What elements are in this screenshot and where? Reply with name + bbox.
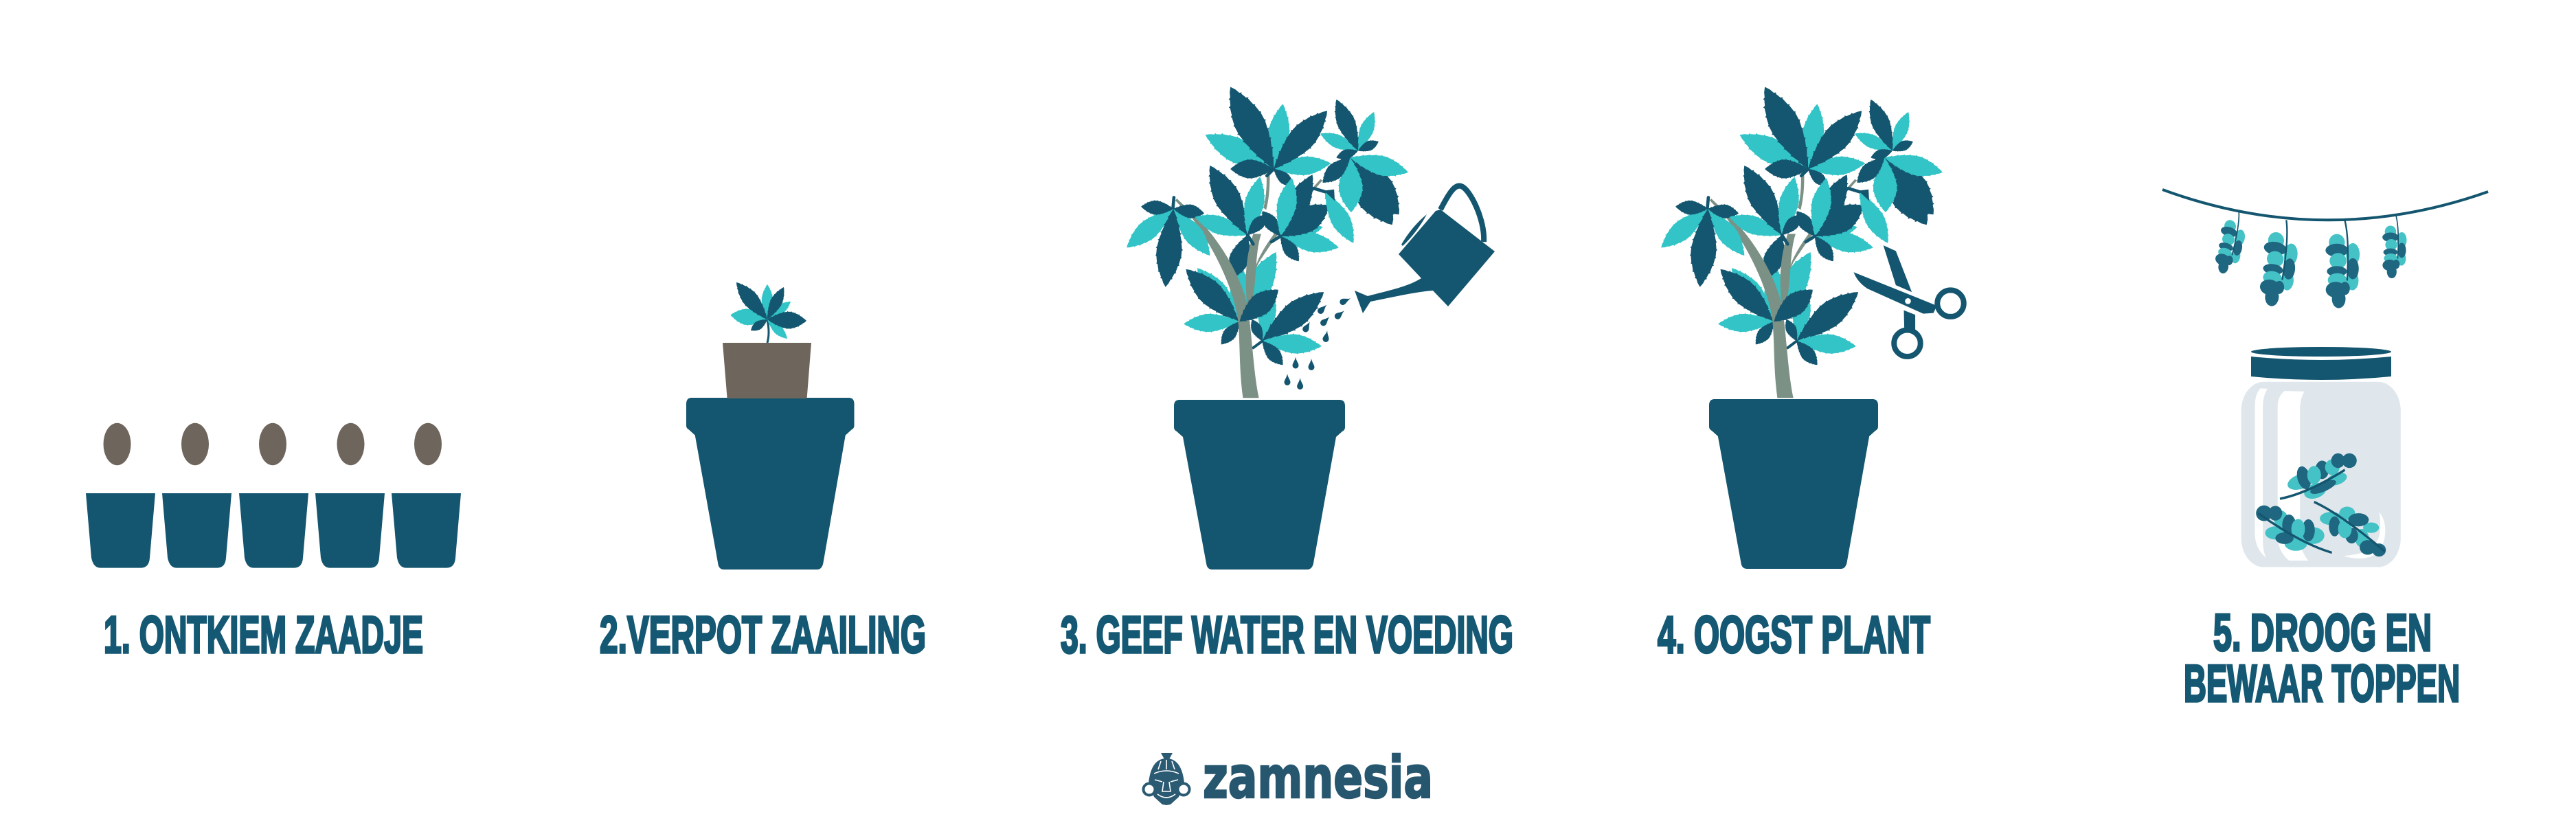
jar lid xyxy=(2251,347,2391,380)
label step 1: 1. ONTKIEM ZAADJE xyxy=(104,606,423,664)
step 1: germinate seeds xyxy=(86,423,461,664)
logo: zamnesia xyxy=(1143,744,1433,811)
label step 5 xyxy=(2184,604,2460,713)
label step 2: 2.VERPOT ZAAILING xyxy=(600,606,926,664)
pot 3 xyxy=(1174,400,1345,570)
large pot xyxy=(686,398,855,570)
seeds xyxy=(103,423,442,465)
jar bud: top xyxy=(2280,453,2357,501)
jar bud: lower left xyxy=(2256,506,2332,552)
icon: watering can xyxy=(1355,186,1495,313)
glass jar xyxy=(2241,382,2401,567)
icon: scissors xyxy=(1854,245,1964,357)
plant 4 xyxy=(1654,80,1947,398)
step 2: repot seedling xyxy=(600,277,926,664)
label step 4: 4. OOGST PLANT xyxy=(1658,606,1930,664)
wordmark: zamnesia xyxy=(1203,744,1433,811)
step 3: water and feed xyxy=(1061,80,1513,664)
peat pot xyxy=(723,343,811,398)
icon: tribal mask xyxy=(1143,753,1190,805)
small pots xyxy=(86,493,461,568)
plant 3 xyxy=(1120,80,1412,398)
step 5: dry and store buds xyxy=(2162,190,2488,713)
pot 4 xyxy=(1709,399,1878,569)
label step 3: 3. GEEF WATER EN VOEDING xyxy=(1061,606,1513,664)
hanging buds xyxy=(2213,209,2406,309)
jar bud: lower right xyxy=(2314,502,2386,556)
seedling xyxy=(730,277,806,343)
drying line xyxy=(2162,190,2488,220)
label step 5: 5. DROOG EN xyxy=(2213,604,2432,662)
step 4: harvest plant xyxy=(1654,80,1964,664)
water drops xyxy=(1285,295,1352,390)
